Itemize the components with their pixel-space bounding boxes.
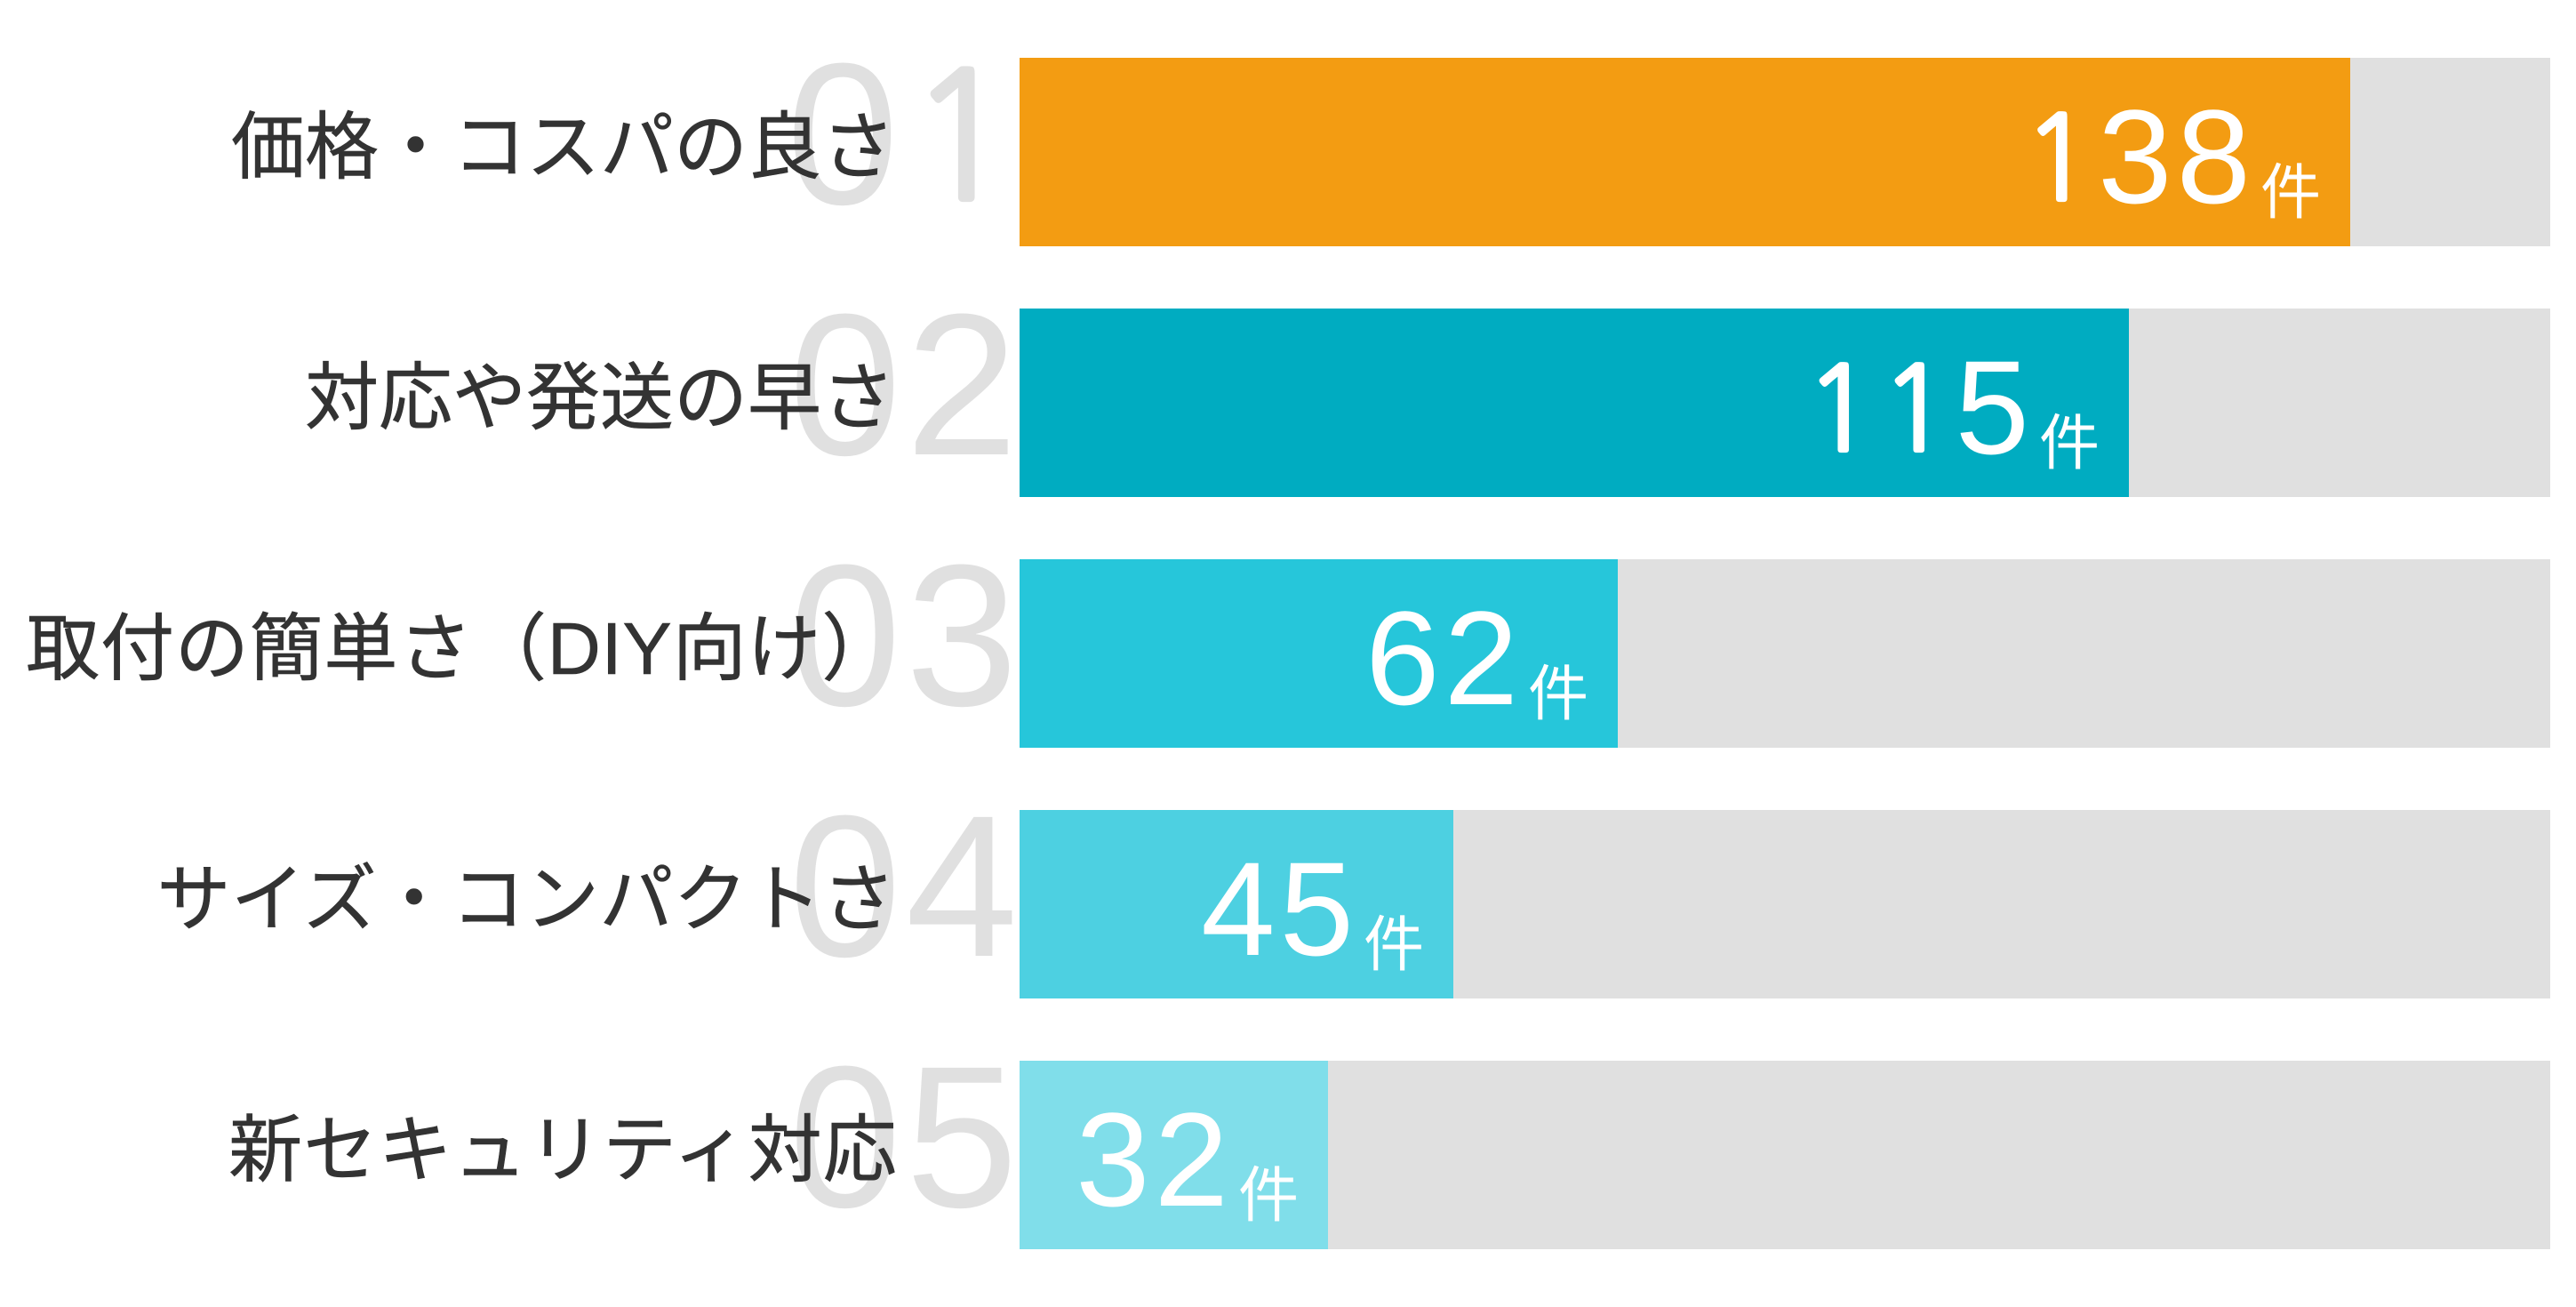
value 32: 32 [1076,1085,1233,1234]
unit 2: 件 [2039,410,2100,477]
unit 5: 件 [1238,1162,1299,1230]
track 1 [1020,58,2550,246]
rank 02: 02 [789,273,1022,498]
track 5 [1020,1061,2550,1249]
unit 4: 件 [1364,911,1424,979]
value 45: 45 [1201,834,1358,983]
value 115: 5 [1956,333,2034,482]
label 5: 新セキュリティ対応 [228,1109,898,1191]
unit 3: 件 [1528,661,1588,728]
row 5: new security support [228,1025,2550,1250]
value 138: 38 [2098,82,2255,231]
bar 3 [1020,559,1618,748]
value 138: 1 [2022,100,2098,218]
rank 01: 1 [908,49,1019,225]
value 62: 62 [1365,583,1523,733]
value 115: 11 [1804,351,1956,469]
bar 1 [1020,58,2350,246]
rank 03: 03 [789,524,1022,749]
row 4: size and compactness [156,774,2550,999]
bar 4 [1020,810,1453,998]
rank 04: 04 [789,774,1022,999]
label 2: 対応や発送の早さ [305,357,895,439]
track 4 [1020,810,2550,998]
rank 01: 0 [787,22,903,247]
label 1: 価格・コスパの良さ [231,106,895,188]
rank 05: 05 [789,1025,1022,1250]
unit 1: 件 [2260,159,2321,227]
track 3 [1020,559,2550,748]
bar 2 [1020,309,2129,497]
bar 5 [1020,1061,1328,1249]
row 2: response and shipping speed [305,273,2550,498]
track 2 [1020,309,2550,497]
row 1: price and value [231,22,2550,247]
row 3: easy installation [26,524,2550,749]
label 4: サイズ・コンパクトさ [156,858,896,941]
label 3: 取付の簡単さ（DIY向け） [26,607,896,690]
